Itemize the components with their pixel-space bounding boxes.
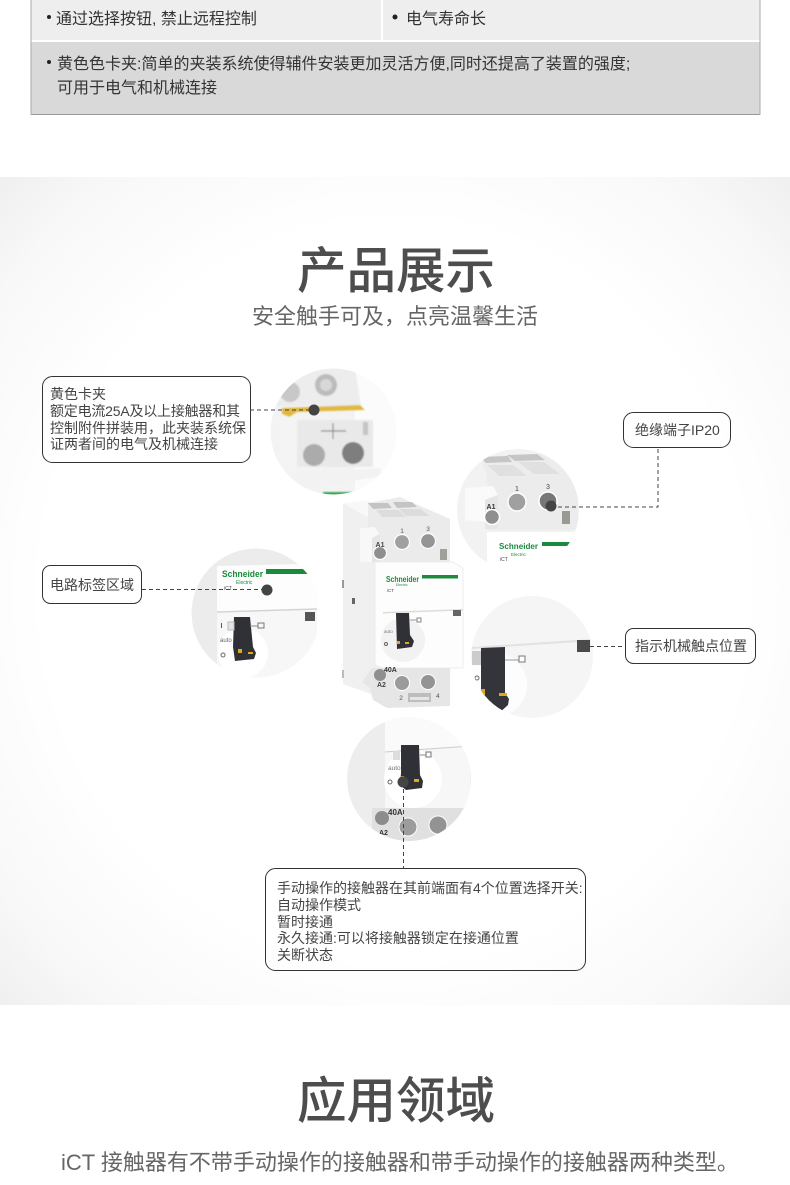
circle: terminal detail: 3 [546, 484, 550, 491]
callout: manual switch: 关断状态 [277, 947, 333, 963]
main product: contactor: Electric [396, 583, 408, 587]
callout: yellow clip: 黄色卡夹 [50, 386, 106, 402]
leader: circuit label [142, 584, 272, 596]
circle: circuit label detail: Electric [236, 580, 253, 586]
feature table: 可用于电气和机械连接 [57, 79, 217, 97]
main product: contactor: 1 [400, 528, 404, 535]
circle: manual switch detail [347, 717, 472, 844]
callout: terminal IP20 [624, 412, 730, 448]
circle: manual switch detail: auto [388, 765, 401, 772]
heading: product showcase: 产品展示 [297, 244, 495, 299]
callout: manual switch [266, 868, 586, 970]
main product: contactor: 3 [426, 526, 430, 533]
main product: contactor: Schneider [386, 575, 419, 584]
main product: contactor [342, 497, 463, 708]
callout: manual switch: 暂时接通 [277, 914, 333, 930]
leader: yellow clip [250, 404, 320, 416]
main product: contactor: 2 [399, 695, 403, 702]
circle: manual switch detail: A2 [379, 830, 388, 837]
main product: contactor: A2 [377, 682, 386, 689]
main product: contactor: A1 [376, 542, 385, 549]
circle: circuit label detail: iCT [224, 586, 232, 592]
circle: terminal detail [457, 449, 579, 562]
main product: contactor: 40A [384, 667, 397, 674]
callout: manual switch: 自动操作模式 [277, 897, 361, 913]
circle: terminal detail: iCT [500, 557, 508, 563]
callout: manual switch: 永久接通:可以将接触器锁定在接通位置 [277, 930, 519, 946]
callout: mechanical contact indicator: 指示机械触点位置 [635, 638, 747, 654]
feature table: 电气寿命长 [406, 10, 486, 28]
main product: contactor: 4 [436, 693, 440, 700]
callout: yellow clip: 额定电流25A及以上接触器和其 [50, 403, 240, 419]
callout: mechanical contact indicator [626, 628, 756, 664]
application intro text: iCT 接触器有不带手动操作的接触器和带手动操作的接触器两种类型。 [61, 1150, 739, 1175]
circle: mechanical indicator detail [463, 596, 593, 718]
circle: terminal detail: Electric [511, 552, 527, 557]
circle: terminal detail: 1 [515, 486, 519, 493]
leader: indicator [590, 646, 625, 648]
callout: yellow clip: 控制附件拼装用，此夹装系统保 [50, 420, 246, 436]
circle: circuit label detail: auto [220, 638, 232, 644]
feature table: 通过选择按钮, 禁止远程控制 [56, 10, 257, 28]
circle: yellow clip detail [270, 368, 381, 494]
callout: circuit label area [42, 566, 142, 604]
main product: contactor: iCT [387, 588, 394, 593]
callout: terminal IP20: 绝缘端子IP20 [635, 422, 720, 438]
feature table: 黄色色卡夹:简单的夹装系统使得辅件安装更加灵活方便,同时还提高了装置的强度; [57, 55, 630, 73]
main product: contactor: auto [384, 629, 393, 634]
circle: circuit label detail: Schneider [222, 569, 263, 580]
callout: yellow clip [42, 376, 250, 462]
circle: terminal detail: A1 [487, 504, 496, 511]
circle: manual switch detail: 40A [388, 808, 403, 817]
circle: terminal detail: Schneider [499, 541, 539, 551]
callout: manual switch: 手动操作的接触器在其前端面有4个位置选择开关: [277, 880, 583, 896]
leader: terminal [546, 448, 658, 512]
circle: circuit label detail [192, 548, 320, 678]
callout: circuit label area: 电路标签区域 [50, 577, 134, 593]
subheading: 安全触手可及，点亮温馨生活 [252, 304, 538, 329]
leader: manual switch [398, 776, 408, 868]
feature table [30, 0, 760, 115]
callout: yellow clip: 证两者间的电气及机械连接 [50, 436, 218, 452]
panel: product showcase [0, 177, 790, 1005]
heading: application field: 应用领域 [297, 1074, 495, 1129]
